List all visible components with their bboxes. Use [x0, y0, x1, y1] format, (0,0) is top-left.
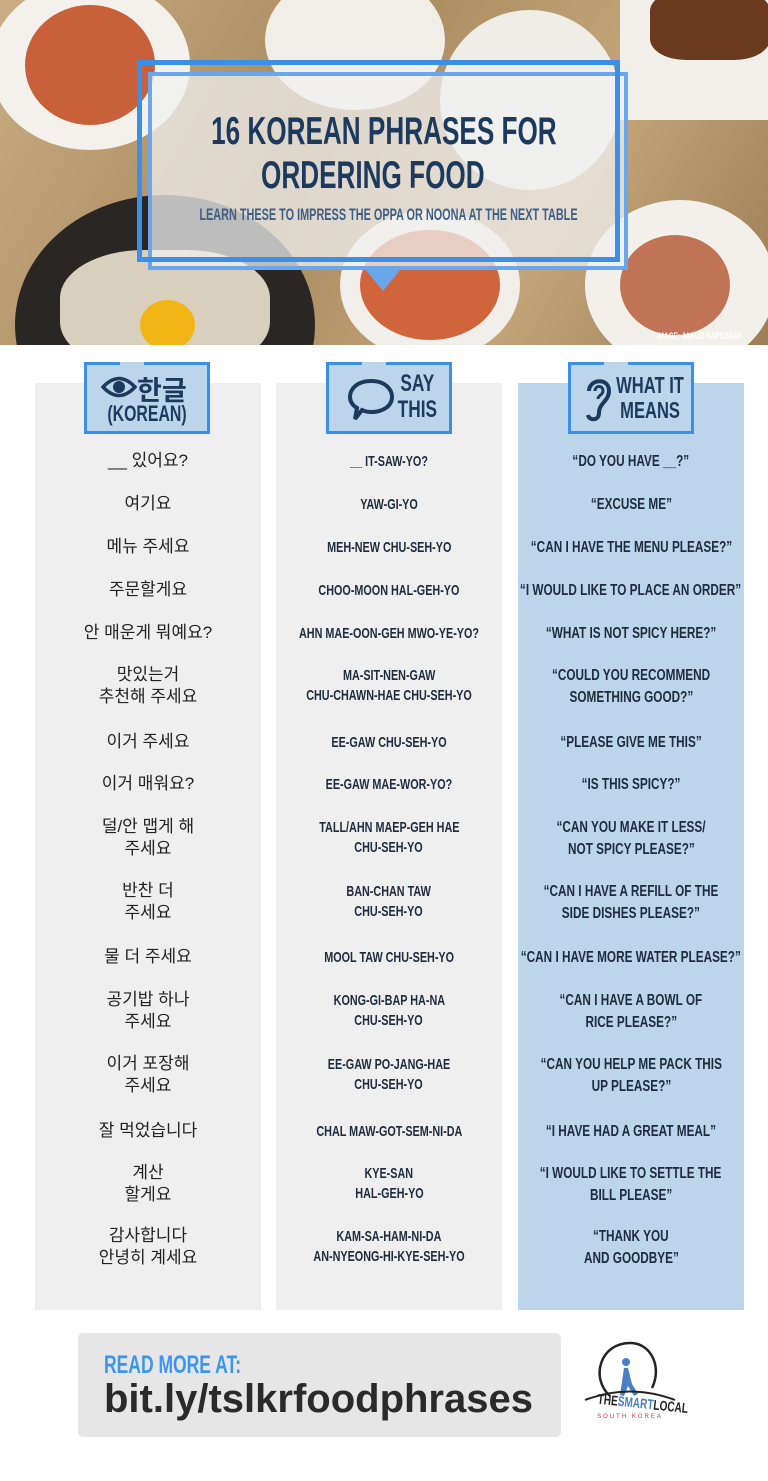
- column: what it means: SIDE DISHES PLEASE?”: [562, 905, 700, 922]
- column: korean: 안 매운게 뭐예요?: [84, 623, 212, 642]
- column: say this: HAL-GEH-YO: [355, 1184, 423, 1202]
- column: korean: 이거 매워요?: [102, 774, 194, 793]
- column: what it means: “WHAT IS NOT SPICY HERE?”: [546, 625, 716, 642]
- logo: [584, 1342, 689, 1420]
- column: korean: 주세요: [125, 1012, 171, 1031]
- column: say this: BAN-CHAN TAW: [347, 883, 431, 900]
- column: say this: EE-GAW PO-JANG-HAE: [328, 1056, 450, 1073]
- column: what it means: BILL PLEASE”: [590, 1187, 672, 1204]
- column: what it means: “CAN YOU HELP ME PACK THIS: [540, 1056, 722, 1073]
- column: what it means: “DO YOU HAVE __?”: [573, 453, 689, 470]
- column: korean: 추천해 주세요: [99, 687, 197, 706]
- logo: THESMARTLOCAL: [597, 1391, 689, 1416]
- column: what it means: SOMETHING GOOD?”: [569, 689, 693, 706]
- column: korean: 감사합니다: [109, 1226, 187, 1245]
- column: korean: 계산: [132, 1163, 164, 1182]
- column: korean: 안녕히 계세요: [99, 1248, 197, 1267]
- title: [211, 110, 557, 197]
- column: what it means: “CAN I HAVE THE MENU PLEASE?”: [530, 539, 732, 556]
- title: 16 KOREAN PHRASES FOR: [211, 110, 557, 153]
- column: what it means: “EXCUSE ME”: [590, 496, 672, 513]
- column: what it means: “I WOULD LIKE TO PLACE AN ORDER”: [520, 582, 742, 599]
- column: korean: 주세요: [125, 1076, 171, 1095]
- column: korean: 물 더 주세요: [104, 947, 192, 966]
- column: what it means: “COULD YOU RECOMMEND: [552, 667, 710, 684]
- header: korean: [84, 362, 210, 434]
- icon: eye: [101, 376, 137, 398]
- column: what it means: “CAN I HAVE A BOWL OF: [560, 992, 702, 1009]
- column: korean: 맛있는거: [117, 665, 179, 684]
- header: say this: THIS: [397, 396, 437, 423]
- column: korean: 이거 포장해: [107, 1054, 189, 1073]
- column: korean: 잘 먹었습니다: [99, 1121, 197, 1140]
- column: say this: EE-GAW MAE-WOR-YO?: [326, 776, 452, 793]
- column: korean: __ 있어요?: [108, 451, 188, 470]
- column: say this: CHU-SEH-YO: [355, 838, 423, 856]
- footer: read more box: [78, 1333, 561, 1437]
- column: say this: CHU-CHAWN-HAE CHU-SEH-YO: [306, 686, 472, 704]
- column: say this: EE-GAW CHU-SEH-YO: [331, 734, 447, 751]
- icon: speech bubble: [348, 379, 394, 420]
- column: korean: 여기요: [125, 494, 171, 513]
- column: say this: YAW-GI-YO: [360, 496, 418, 513]
- column: say this: AN-NYEONG-HI-KYE-SEH-YO: [313, 1248, 465, 1264]
- column: say this: MOOL TAW CHU-SEH-YO: [324, 949, 454, 966]
- column: what it means: AND GOODBYE”: [584, 1250, 678, 1267]
- column: say this: CHAL MAW-GOT-SEM-NI-DA: [316, 1123, 462, 1140]
- column: say this: __ IT-SAW-YO?: [350, 453, 428, 470]
- column: korean: 주문할게요: [109, 580, 187, 599]
- subtitle: LEARN THESE TO IMPRESS THE OPPA OR NOONA AT THE NEXT TABLE: [199, 205, 578, 224]
- title box: [137, 60, 628, 291]
- column: say this: KAM-SA-HAM-NI-DA: [337, 1228, 441, 1245]
- header: say this: SAY: [400, 370, 434, 397]
- header photo: [0, 0, 768, 345]
- column: korean: 반찬 더: [122, 881, 174, 900]
- header: say this: [326, 362, 452, 434]
- column: say this: [276, 383, 502, 1310]
- column: korean: 주세요: [125, 903, 171, 922]
- header: what it means: WHAT IT: [616, 372, 684, 398]
- column: korean: 이거 주세요: [107, 732, 189, 751]
- footer: read more box: bit.ly/tslkrfoodphrases: [104, 1377, 533, 1421]
- column: what it means: “CAN I HAVE MORE WATER PLEASE?”: [521, 949, 741, 966]
- column: what it means: UP PLEASE?”: [591, 1078, 671, 1095]
- column: korean: 메뉴 주세요: [107, 537, 189, 556]
- column: what it means: RICE PLEASE?”: [585, 1014, 677, 1031]
- column: what it means: “PLEASE GIVE ME THIS”: [560, 734, 702, 751]
- column: what it means: “I WOULD LIKE TO SETTLE THE: [540, 1165, 722, 1182]
- header: what it means: [568, 362, 694, 434]
- header: what it means: MEANS: [620, 397, 680, 423]
- column: say this: CHU-SEH-YO: [355, 902, 423, 920]
- column: say this: CHU-SEH-YO: [355, 1012, 423, 1028]
- column: what it means: NOT SPICY PLEASE?”: [568, 841, 694, 858]
- title: ORDERING FOOD: [261, 154, 485, 197]
- column: say this: AHN MAE-OON-GEH MWO-YE-YO?: [299, 625, 479, 642]
- column: what it means: “I HAVE HAD A GREAT MEAL”: [546, 1123, 716, 1140]
- image credit: IMAGE: JAKUB KAPUSNAK: [657, 331, 743, 341]
- icon: ear: [586, 379, 611, 422]
- column: korean: 할게요: [125, 1185, 171, 1204]
- column: say this: MA-SIT-NEN-GAW: [343, 667, 435, 684]
- column: say this: KYE-SAN: [365, 1165, 413, 1182]
- column: korean: 덜/안 맵게 해: [102, 817, 194, 836]
- column: korean: 공기밥 하나: [107, 990, 189, 1009]
- column: korean: [35, 383, 261, 1310]
- column: korean: 주세요: [125, 839, 171, 858]
- column: what it means: “CAN YOU MAKE IT LESS/: [556, 819, 706, 836]
- column: what it means: “THANK YOU: [593, 1228, 669, 1245]
- column: say this: CHU-SEH-YO: [355, 1076, 423, 1092]
- column: what it means: [518, 383, 744, 1310]
- column: say this: KONG-GI-BAP HA-NA: [333, 992, 445, 1009]
- column: what it means: “IS THIS SPICY?”: [582, 776, 680, 793]
- header: korean: 한글: [137, 376, 187, 406]
- column: what it means: “CAN I HAVE A REFILL OF THE: [544, 883, 718, 900]
- footer: read more box: READ MORE AT:: [104, 1351, 241, 1379]
- column: say this: TALL/AHN MAEP-GEH HAE: [319, 819, 459, 836]
- logo: SOUTH KOREA: [597, 1414, 663, 1420]
- column: say this: CHOO-MOON HAL-GEH-YO: [318, 582, 459, 599]
- column: say this: MEH-NEW CHU-SEH-YO: [327, 539, 451, 556]
- header: korean: (KOREAN): [107, 401, 187, 426]
